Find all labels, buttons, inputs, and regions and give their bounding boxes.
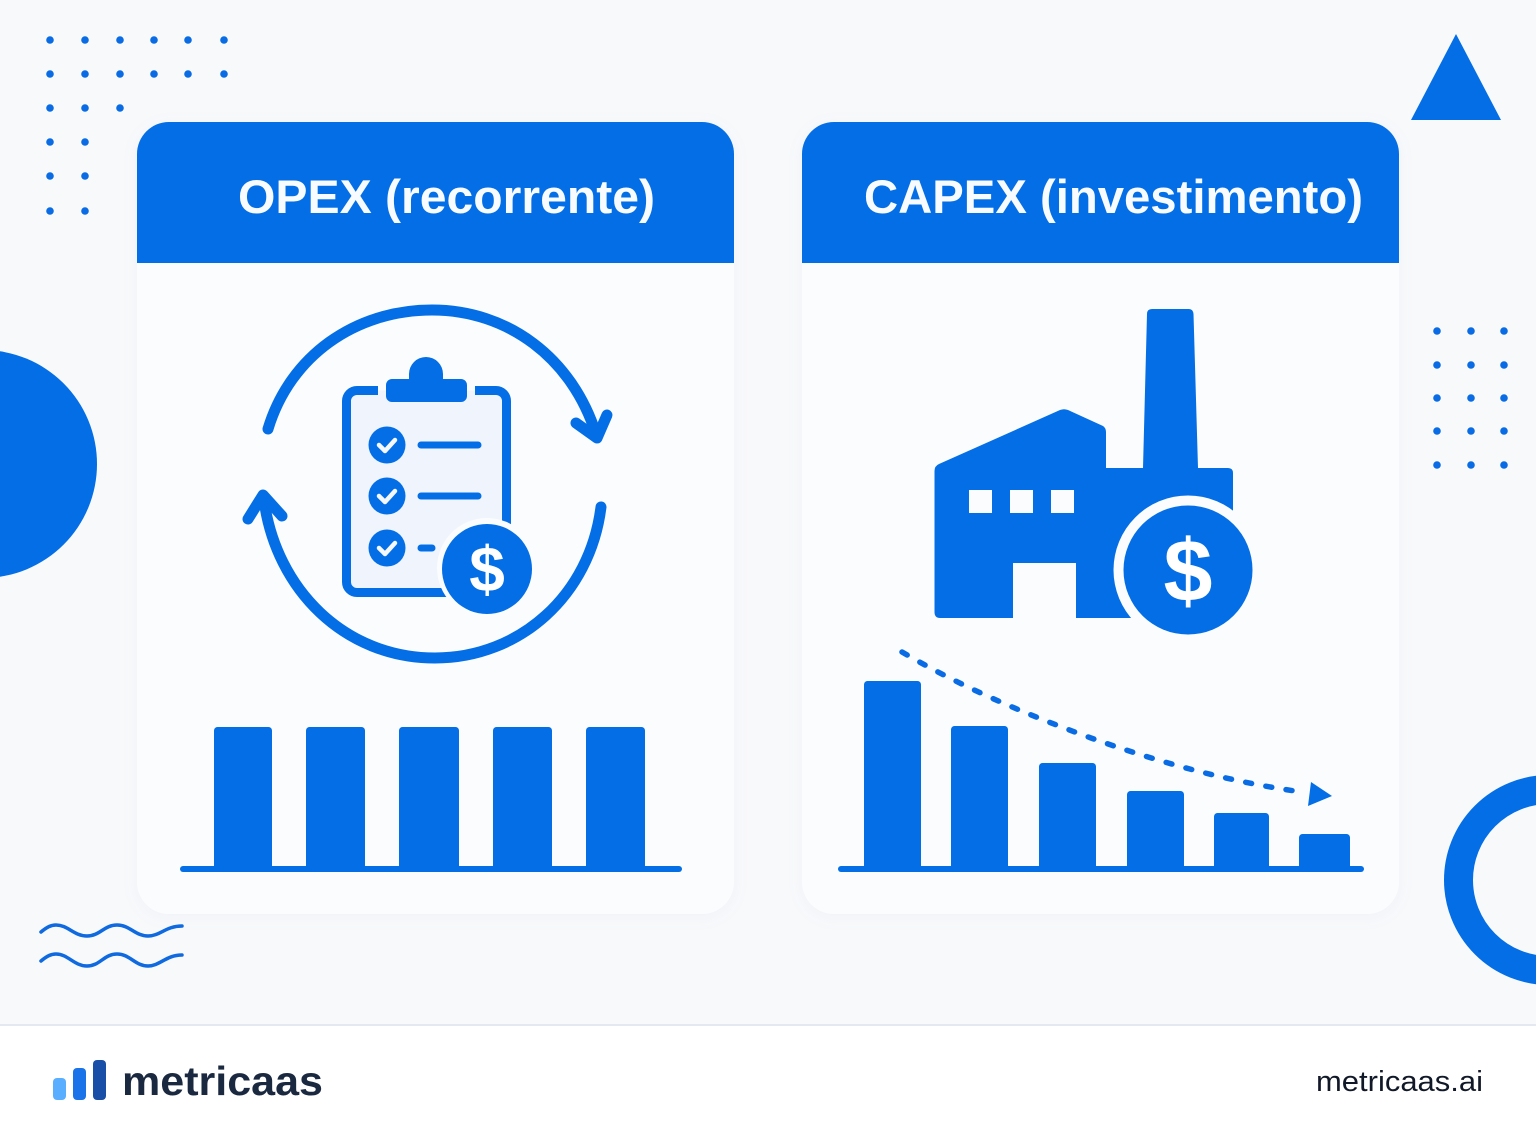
- decoration: left semicircle: [0, 350, 97, 578]
- clipboard sheet: [346, 390, 506, 592]
- website url: metricaas.ai: [1316, 1066, 1483, 1098]
- logo mark: [53, 1060, 106, 1100]
- checklist row 1: [368, 426, 478, 464]
- icon: dollar coin: $: [1164, 521, 1212, 620]
- heading: OPEX: OPEX (recorrente): [238, 170, 655, 223]
- decoration: right ring: [1458, 790, 1536, 970]
- logo wordmark: metricaas: [122, 1058, 323, 1104]
- header band: [137, 122, 734, 263]
- decoration: dot grid top left: [46, 36, 228, 215]
- factory windows: [969, 490, 1074, 513]
- checklist row 3: [368, 530, 432, 566]
- factory building: [934, 309, 1233, 618]
- panel background: [137, 122, 734, 914]
- footer: [0, 1025, 1536, 1136]
- footer background: [0, 1025, 1536, 1136]
- checklist row 2: [368, 478, 478, 514]
- clipboard clip: [386, 357, 467, 402]
- icon: factory: [934, 309, 1262, 644]
- decoration: dot grid right: [1433, 327, 1508, 469]
- icon: clipboard: [346, 357, 537, 618]
- panel: OPEX: [137, 122, 734, 914]
- header band: [802, 122, 1399, 263]
- decoration: triangle: [1411, 34, 1501, 120]
- bar chart: declining depreciation: [838, 681, 1364, 872]
- clipboard outline: [346, 390, 506, 592]
- decoration: waves: [41, 925, 182, 966]
- panel background: [802, 122, 1399, 914]
- icon: dollar coin: $: [469, 533, 505, 605]
- arrow: dashed downward trend: [902, 652, 1332, 806]
- bar chart: flat recurring costs: [180, 727, 682, 872]
- icon: dollar coin: [1114, 496, 1262, 644]
- panel: CAPEX: [802, 122, 1399, 914]
- icon: recurring cycle arrows: [248, 310, 607, 658]
- icon: dollar coin: [437, 518, 537, 618]
- heading: CAPEX: CAPEX (investimento): [864, 170, 1363, 223]
